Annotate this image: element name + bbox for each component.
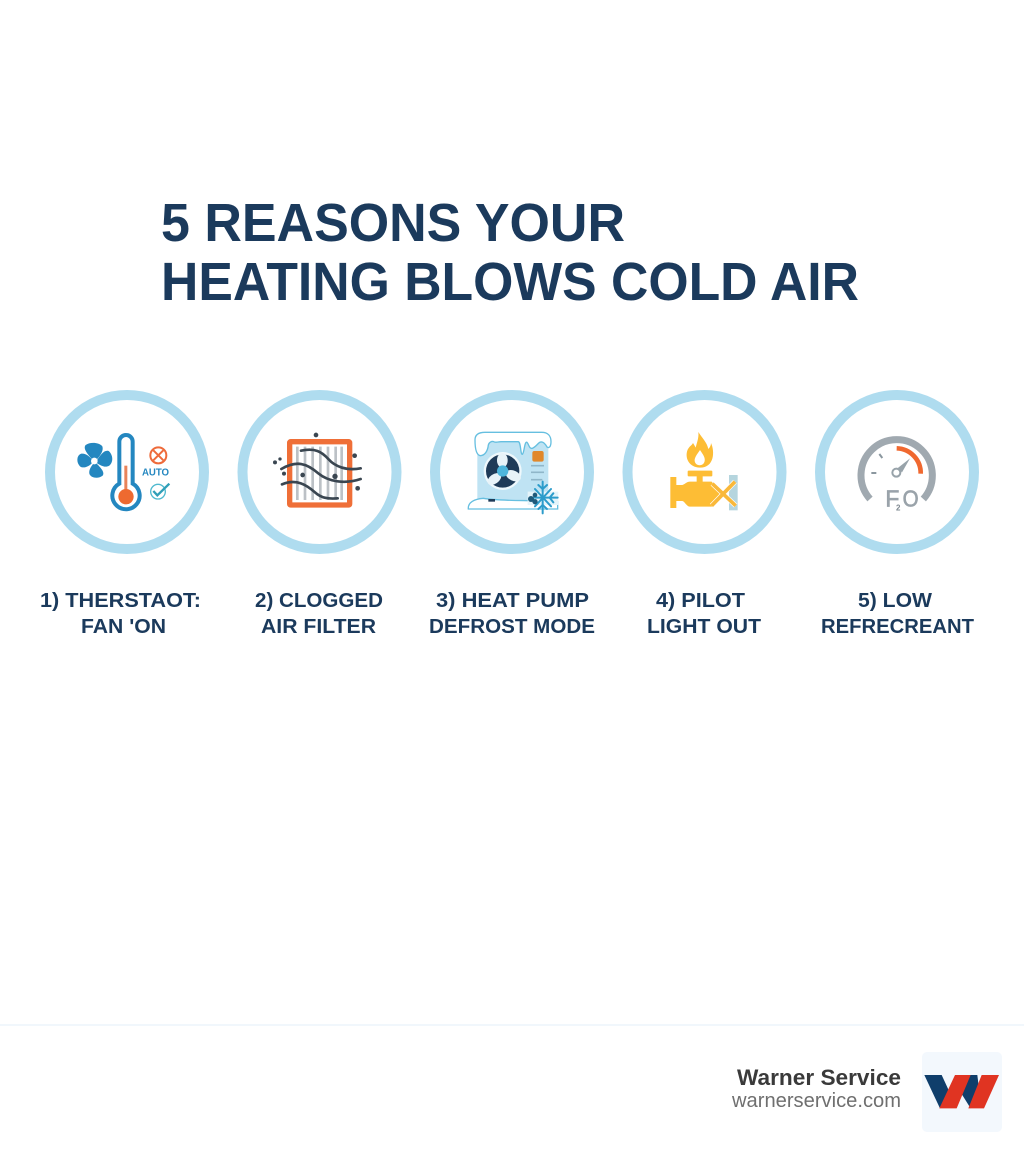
icon: pressure gauge: 2 [896,504,901,513]
title [161,193,859,312]
label: reason 1: 1) THERSTAOT: [40,589,201,612]
label: reason 2: AIR FILTER [261,615,376,638]
icon: pressure gauge [861,440,932,513]
label: reason 4: 4) PILOT [656,589,745,612]
label: reason 1: FAN 'ON [81,615,166,638]
panel: reason 5 low refrigerant [820,395,974,638]
panel: reason 2 clogged filter [242,395,396,638]
label: reason 5 [821,589,974,638]
icon: thermostat with fan and auto setting [77,435,169,509]
panel: reason 1 thermostat [40,395,204,638]
title: HEATING BLOWS COLD AIR [161,252,859,312]
title: 5 REASONS YOUR [161,193,625,253]
icon: frozen heat pump [468,432,558,513]
label: reason 5: REFRECREANT [821,615,974,638]
panel: reason 3 heat pump defrost [429,395,595,638]
icon: pressure gauge: F [885,486,899,512]
panel: reason 4 pilot light [628,395,782,638]
label: reason 4 [647,589,761,638]
label: reason 3: 3) HEAT PUMP [436,589,589,612]
label: reason 2: 2) CLOGGED [255,589,383,612]
label: reason 3: DEFROST MODE [429,615,595,638]
label: reason 2 [255,589,383,638]
icon: dirty air filter [273,433,361,505]
label: reason 4: LIGHT OUT [647,615,761,638]
logo [922,1052,1002,1132]
footer brand text: warnerservice.com [731,1090,901,1112]
footer brand text [731,1065,901,1112]
icon: pressure gauge: O [903,486,919,512]
footer brand text: Warner Service [737,1065,901,1090]
label: reason 1 [40,589,201,638]
label: reason 3 [429,589,595,638]
icon: gas valve with flame [670,432,738,510]
icon: thermostat with fan and auto setting: AUTO [142,468,169,479]
label: reason 5: 5) LOW [858,589,933,612]
